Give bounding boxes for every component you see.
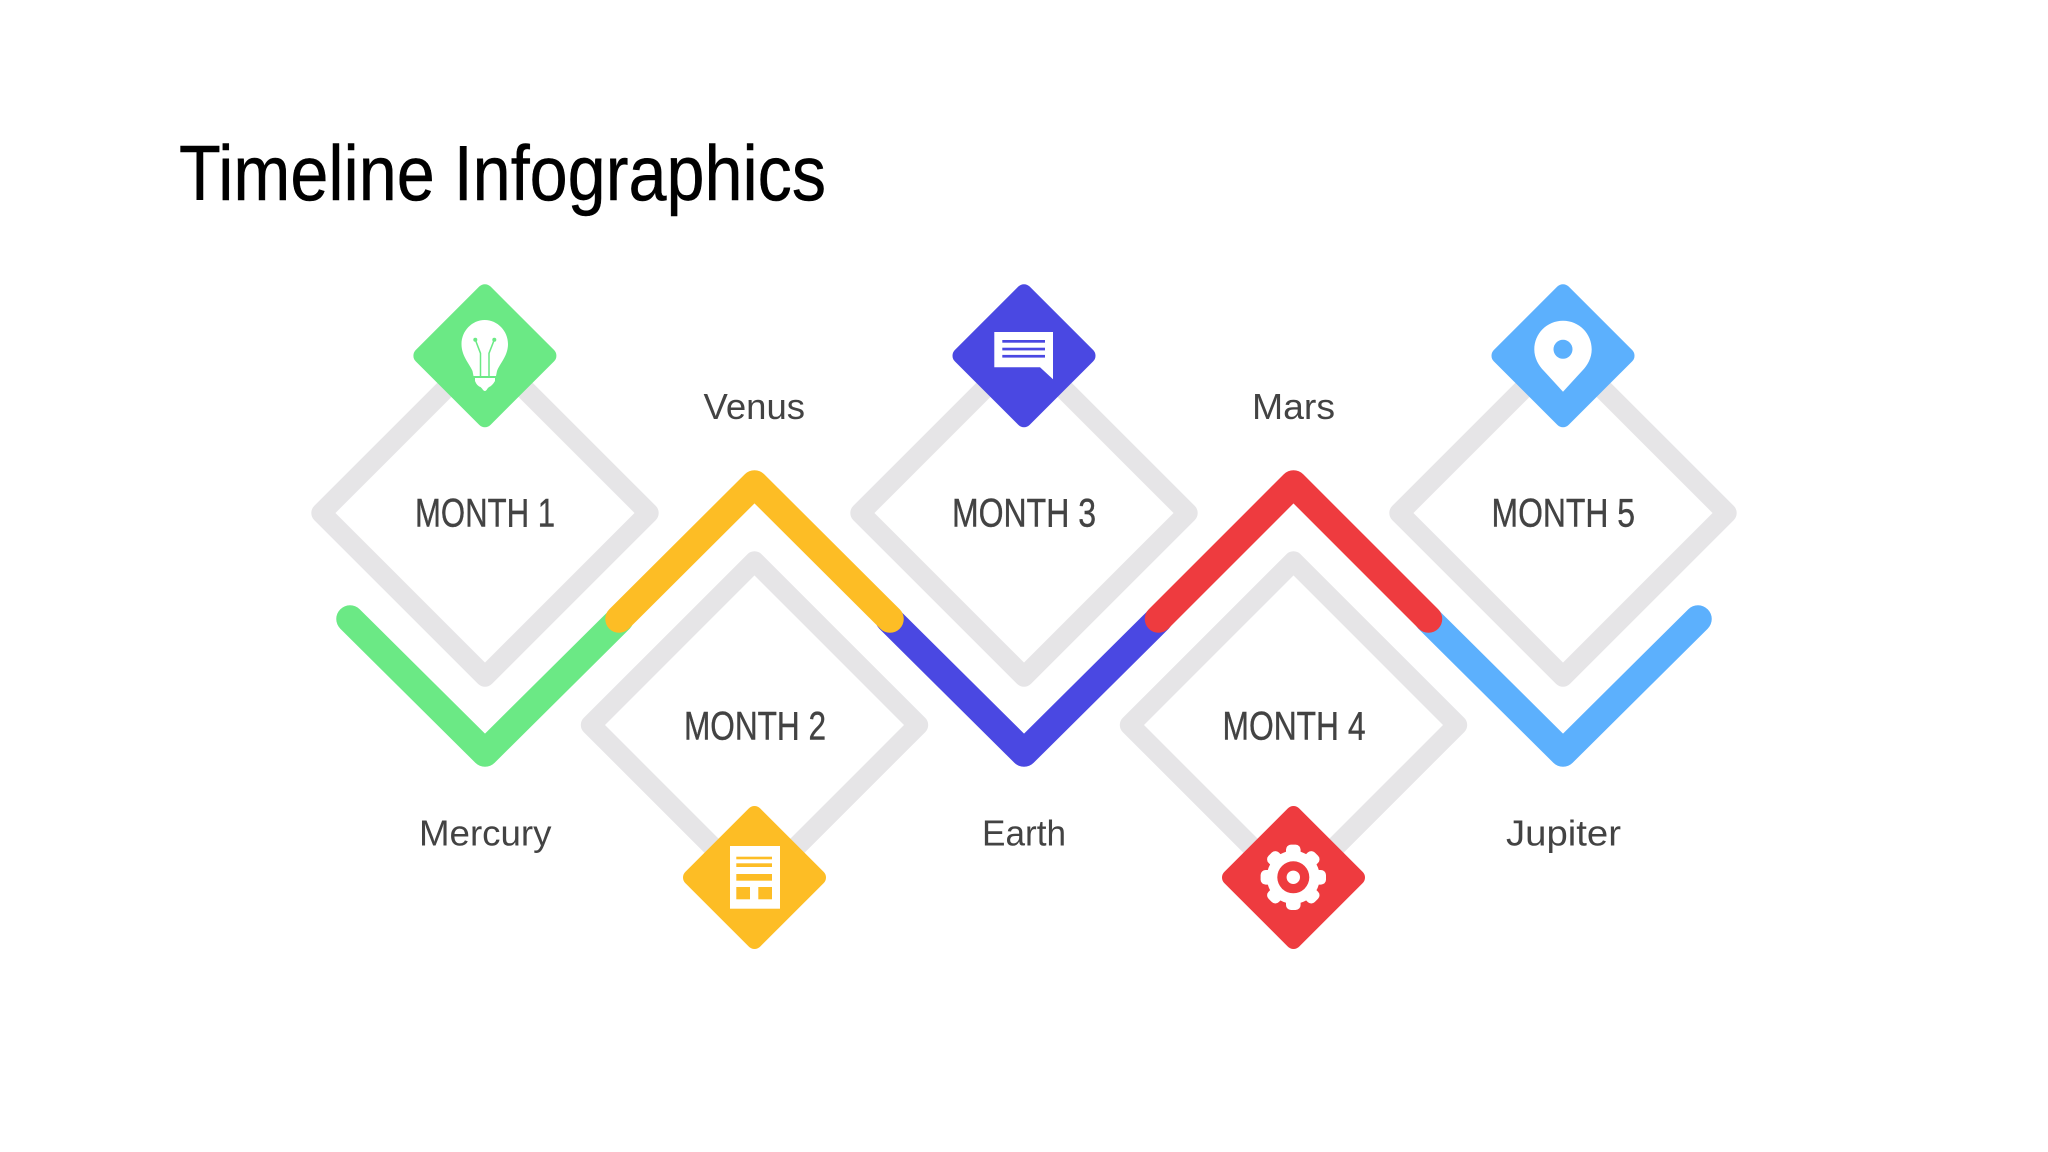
label: month 3: MONTH 3 — [952, 492, 1096, 536]
icon: gear on red diamond — [1219, 803, 1368, 952]
label: Mars: Mars — [1252, 386, 1335, 427]
frame: month 5 — [1399, 349, 1727, 677]
label: Mercury: Mercury — [419, 812, 552, 854]
label: month 1: MONTH 1 — [415, 492, 555, 536]
frame: month 4 — [1130, 561, 1457, 889]
label: month 5: MONTH 5 — [1492, 492, 1635, 536]
label: Venus: Venus — [704, 386, 805, 427]
planet labels — [419, 386, 1621, 854]
frame: month 2 — [591, 561, 918, 889]
label: Jupiter: Jupiter — [1506, 812, 1621, 854]
label: Earth: Earth — [982, 812, 1066, 854]
path segment: Venus yellow — [619, 484, 890, 619]
grey month frames — [321, 349, 1727, 889]
coloured timeline path — [350, 484, 1698, 753]
frame: month 1 — [321, 349, 649, 677]
icon: map pin on light blue diamond — [1488, 281, 1638, 431]
path segment: Jupiter light blue — [1428, 619, 1698, 753]
label: month 2: MONTH 2 — [684, 704, 826, 748]
icon: document on yellow diamond — [680, 803, 829, 952]
icon: lightbulb on green diamond — [410, 281, 560, 431]
path segment: Mercury green — [350, 619, 620, 753]
path segment: Earth indigo — [889, 619, 1159, 753]
label: month 4: MONTH 4 — [1222, 704, 1366, 748]
path segment: Mars red — [1158, 484, 1428, 619]
title: Timeline Infographics — [179, 129, 826, 217]
month labels — [415, 492, 1635, 748]
icon: speech bubble on indigo diamond — [949, 281, 1099, 431]
frame: month 3 — [860, 349, 1188, 677]
